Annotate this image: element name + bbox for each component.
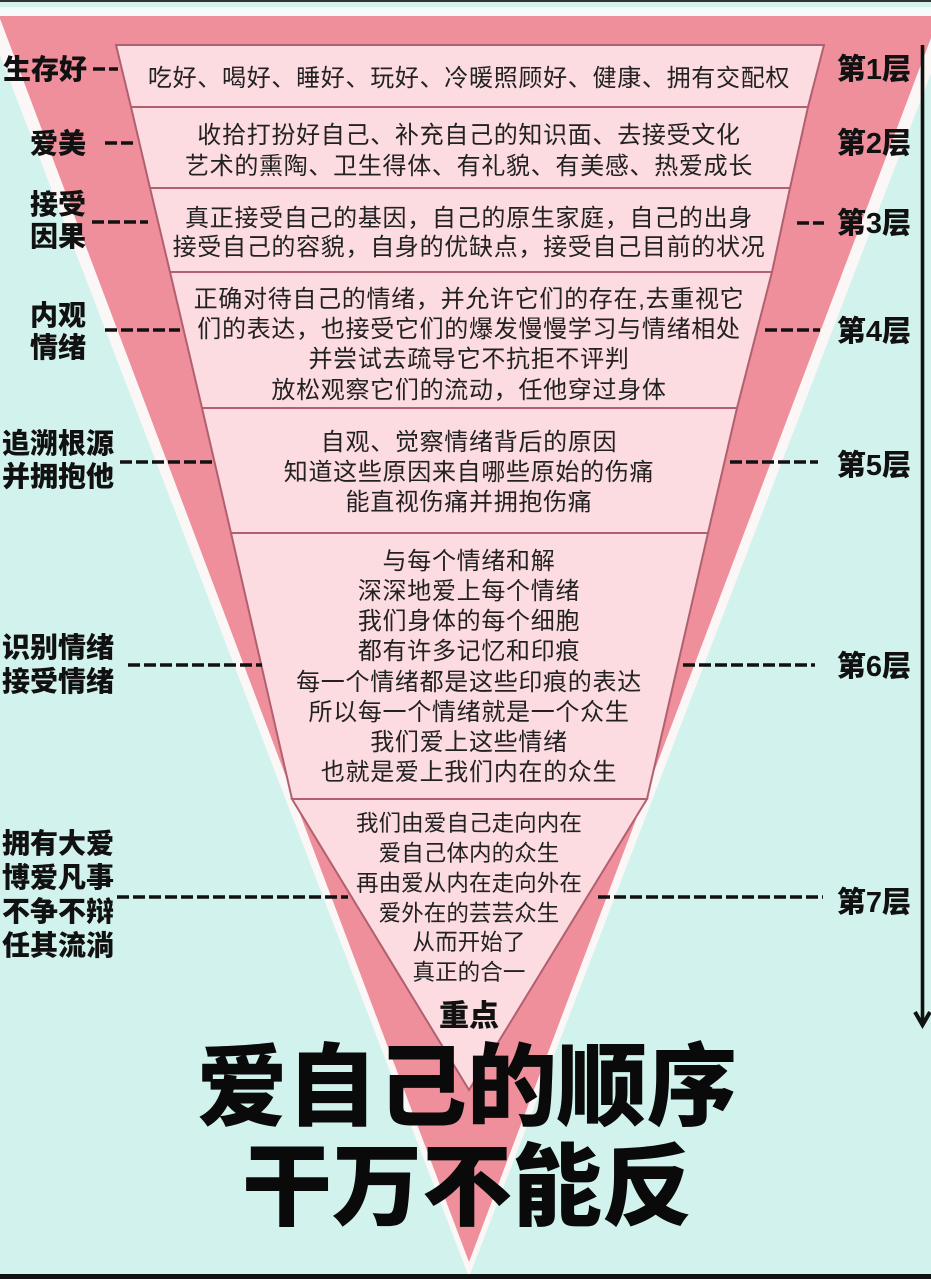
tier 2 text: 收拾打扮好自己、补充自己的知识面、去接受文化 bbox=[197, 122, 741, 149]
tier 4 text: 们的表达，也接受它们的爆发慢慢学习与情绪相处 bbox=[197, 316, 741, 343]
tier 6 text bbox=[296, 548, 642, 786]
tier 4 text: 正确对待自己的情绪，并允许它们的存在,去重视它 bbox=[194, 286, 744, 313]
tier 7 text bbox=[356, 811, 582, 985]
tier 5 text: 知道这些原因来自哪些原始的伤痛 bbox=[284, 459, 654, 486]
tier 5 text: 能直视伤痛并拥抱伤痛 bbox=[346, 489, 592, 516]
tier 7 text: 再由爱从内在走向外在 bbox=[356, 871, 582, 896]
left labels: 接受情绪 bbox=[2, 666, 114, 697]
tier 4 text: 放松观察它们的流动，任他穿过身体 bbox=[271, 377, 667, 404]
tier 6 text: 与每个情绪和解 bbox=[383, 548, 555, 575]
tier 4 text bbox=[194, 286, 744, 404]
tier 3 text: 真正接受自己的基因，自己的原生家庭，自己的出身 bbox=[185, 205, 753, 232]
dashed connectors bbox=[92, 69, 824, 897]
left labels: 追溯根源 bbox=[2, 427, 114, 459]
right layer labels: 第7层 bbox=[837, 885, 911, 919]
title: 干万不能反 bbox=[242, 1138, 692, 1238]
tier 7 text: 真正的合一 bbox=[412, 960, 526, 985]
tier 6 text: 都有许多记忆和印痕 bbox=[358, 638, 580, 665]
left labels bbox=[2, 54, 114, 961]
tier 7 text: 爱自己体内的众生 bbox=[379, 841, 559, 866]
left labels: 识别情绪 bbox=[2, 632, 114, 663]
title: 爱自己的顺序 bbox=[197, 1038, 737, 1138]
left labels: 内观 bbox=[30, 300, 86, 331]
tier 6 text: 我们身体的每个细胞 bbox=[358, 608, 580, 635]
tier 5 text bbox=[284, 429, 654, 516]
tier 6 text: 我们爱上这些情绪 bbox=[370, 729, 568, 756]
tier 3 text bbox=[173, 205, 765, 261]
tier 2 text: 艺术的熏陶、卫生得体、有礼貌、有美感、热爱成长 bbox=[185, 153, 753, 180]
tier 7 text: 爱外在的芸芸众生 bbox=[379, 901, 559, 926]
tier 6 text: 所以每一个情绪就是一个众生 bbox=[308, 699, 630, 726]
right layer labels bbox=[837, 52, 911, 919]
right layer labels: 第3层 bbox=[837, 206, 911, 240]
left labels: 生存好 bbox=[3, 54, 87, 85]
tier 6 text: 深深地爱上每个情绪 bbox=[358, 578, 580, 605]
order arrow bbox=[915, 45, 930, 1025]
tier 4 text: 并尝试去疏导它不抗拒不评判 bbox=[308, 346, 630, 373]
left labels: 博爱凡事 bbox=[2, 862, 114, 893]
right layer labels: 第1层 bbox=[837, 52, 911, 86]
inner pyramid tiers bbox=[116, 45, 824, 1090]
right layer labels: 第2层 bbox=[837, 126, 911, 160]
key point label: 重点 bbox=[439, 1000, 499, 1033]
right layer labels: 第4层 bbox=[837, 314, 911, 348]
tier 1 text: 吃好、喝好、睡好、玩好、冷暖照顾好、健康、拥有交配权 bbox=[148, 65, 790, 92]
tier 6 text: 也就是爱上我们内在的众生 bbox=[321, 759, 617, 786]
right layer labels: 第6层 bbox=[837, 649, 911, 683]
title bbox=[197, 1038, 737, 1238]
left labels: 因果 bbox=[30, 221, 86, 252]
tier 2 text bbox=[185, 122, 753, 180]
tier 7 text: 从而开始了 bbox=[412, 930, 526, 955]
left labels: 并拥抱他 bbox=[2, 461, 114, 492]
left labels: 不争不辩 bbox=[2, 896, 114, 927]
bottom bar bbox=[0, 1274, 931, 1279]
left labels: 拥有大爱 bbox=[2, 828, 114, 859]
left labels: 任其流淌 bbox=[2, 930, 114, 961]
tier 6 text: 每一个情绪都是这些印痕的表达 bbox=[296, 669, 642, 696]
left labels: 接受 bbox=[30, 189, 86, 220]
right layer labels: 第5层 bbox=[837, 448, 911, 482]
tier 7 text: 我们由爱自己走向内在 bbox=[356, 811, 582, 836]
tier 3 text: 接受自己的容貌，自身的优缺点，接受自己目前的状况 bbox=[173, 234, 765, 261]
tier 5 text: 自观、觉察情绪背后的原因 bbox=[321, 429, 617, 456]
left labels: 情绪 bbox=[30, 332, 86, 363]
left labels: 爱美 bbox=[30, 127, 86, 159]
